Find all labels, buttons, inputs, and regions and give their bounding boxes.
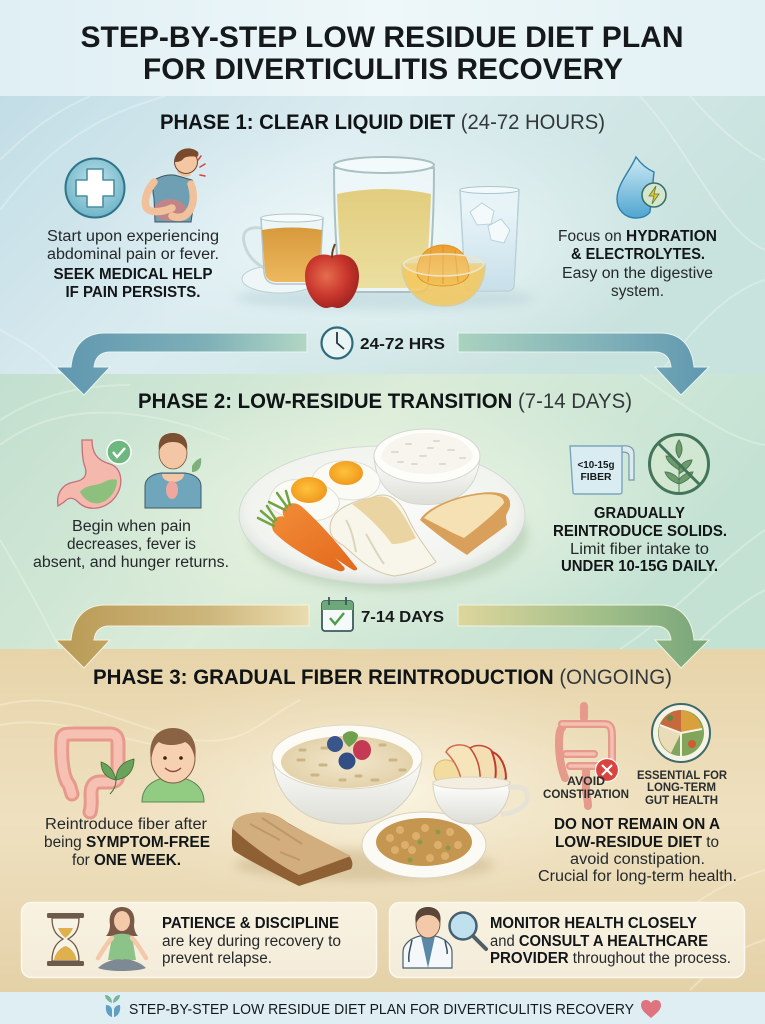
icon: fiber measuring cup [570,446,634,494]
heading: phase 3: PHASE 3: GRADUAL FIBER REINTRODUCTION (ONGOING) [93,666,672,689]
icon: carrots [258,491,357,571]
icon: heart [641,1000,661,1018]
arrow: phase 1 left [56,333,307,395]
text: reintroduce fiber: Reintroduce fiber after [45,816,207,833]
text: monitor health: MONITOR HEALTH CLOSELY [490,915,698,932]
card: patience and discipline [22,902,376,978]
card: monitor health [390,902,744,978]
label: avoid constipation [543,776,629,801]
heading: phase 2: PHASE 2: LOW-RESIDUE TRANSITION (7-14 DAYS) [138,390,632,413]
icon: fiber measuring cup: <10-15g [578,460,614,471]
panel: phase 1 clear liquid diet [0,96,765,375]
text: do not remain on low-residue diet: Crucial for long-term health. [538,868,737,885]
title: STEP-BY-STEP LOW RESIDUE DIET PLAN [80,21,684,54]
icon: water drop with lightning bolt [617,157,666,218]
icon: cup of apple slices [433,745,528,824]
text: gradually reintroduce solids: UNDER 10-15G DAILY. [561,558,718,575]
icon: calendar [322,597,353,631]
icon: fish fillet [330,495,436,576]
timeline label: 24-72 hrs: 24-72 HRS [360,336,445,353]
text: start upon experiencing: IF PAIN PERSISTS. [66,284,200,301]
text: start upon experiencing: Start upon experiencing [47,228,219,245]
text: reintroduce fiber [44,816,210,869]
text: patience and discipline: PATIENCE & DISCIPLINE [162,915,339,932]
icon: no plant [650,434,708,494]
timeline label: 24-72 hrs [322,328,445,358]
label: essential for gut health: LONG-TERM [647,782,716,794]
text: begin when pain decreases: decreases, fever is [67,536,196,553]
text: hydration and electrolytes [558,228,717,300]
text: start upon experiencing [47,228,219,301]
icon: whole grain toast [232,812,352,886]
text: do not remain on low-residue diet: LOW-RESIDUE DIET to [555,834,719,851]
icon: toast [420,492,510,555]
label: avoid constipation: AVOID [567,776,605,788]
text: hydration and electrolytes: Focus on HYDRATION [558,228,717,245]
icon: water glass with ice [460,186,519,291]
text: begin when pain decreases: Begin when pain [72,518,191,535]
icon: footer leaf [105,995,120,1017]
text: reintroduce fiber: for ONE WEEK. [72,852,181,869]
arrow: phase 2 left [56,605,309,668]
icon: colon with warning x [559,706,618,806]
illustration: clear liquids [235,157,535,310]
text: gradually reintroduce solids: Limit fiber intake to [570,541,709,558]
illustration: fiber foods [232,725,528,886]
label: essential for gut health [637,770,728,807]
label: essential for gut health: GUT HEALTH [645,795,718,807]
timeline label: 7-14 days [322,597,444,631]
icon: fried eggs [269,461,380,521]
text: hydration and electrolytes: Easy on the digestive [562,265,713,282]
text: patience and discipline: prevent relapse. [162,950,272,967]
title [80,21,684,86]
icon: balanced plate [652,704,710,762]
text: start upon experiencing: SEEK MEDICAL HELP [54,266,212,283]
icon: apple [305,244,359,308]
text: gradually reintroduce solids: GRADUALLY [594,505,686,522]
icon: magnifying glass [450,912,486,949]
icon: medical cross [66,158,124,218]
title: FOR DIVERTICULITIS RECOVERY [143,53,623,86]
icon: cup of tea [242,214,323,293]
icon: man with abdominal pain [145,148,205,222]
text: hydration and electrolytes: & ELECTROLYTES. [571,246,705,263]
plate [239,446,525,584]
heading: phase 1: PHASE 1: CLEAR LIQUID DIET (24-72 HOURS) [160,111,605,134]
icon: recovering person [145,433,201,508]
text: do not remain on low-residue diet: avoid constipation. [570,851,705,868]
text: monitor health [490,915,731,967]
icon: plate of legumes [362,812,486,878]
panel: phase 2 low-residue transition [0,374,765,649]
icon: doctor [403,907,452,968]
text: start upon experiencing: abdominal pain or fever. [47,246,219,263]
panel: phase 3 gradual fiber reintroduction [0,649,765,992]
text: patience and discipline [162,915,341,967]
label: essential for gut health: ESSENTIAL FOR [637,770,728,782]
icon: gelatin bowl [402,245,485,306]
text: hydration and electrolytes: system. [611,283,664,300]
icon: meditating woman [98,907,146,971]
text: monitor health: and CONSULT A HEALTHCARE [490,933,708,950]
text: begin when pain decreases [33,518,229,571]
text: do not remain on low-residue diet: DO NOT REMAIN ON A [554,816,720,833]
illustration: low-residue plate [239,429,528,590]
icon: colon with sprout [62,734,134,812]
icon: large glass of broth [334,157,434,292]
text: reintroduce fiber: being SYMPTOM-FREE [44,834,210,851]
label: avoid constipation: CONSTIPATION [543,789,629,801]
icon: clock [322,328,352,358]
icon: fiber measuring cup: FIBER [580,471,612,483]
arrow: phase 2 right [458,605,709,668]
text: gradually reintroduce solids: REINTRODUCE SOLIDS. [553,523,727,540]
icon: hourglass [47,913,84,966]
text: begin when pain decreases: absent, and hunger returns. [33,554,229,571]
header band [0,0,765,96]
timeline label: 7-14 days: 7-14 DAYS [361,609,444,626]
icon: stomach with check mark [58,440,131,508]
icon: smiling person [142,728,204,802]
text: monitor health: PROVIDER throughout the process. [490,950,731,967]
icon: oatmeal bowl with berries [272,725,422,824]
text: gradually reintroduce solids [553,505,727,575]
text: do not remain on low-residue diet [538,816,737,885]
footer band [0,992,765,1024]
footer text: STEP-BY-STEP LOW RESIDUE DIET PLAN FOR DIVERTICULITIS RECOVERY [129,1001,634,1018]
text: patience and discipline: are key during recovery to [162,933,341,950]
arrow: phase 1 right [458,333,709,395]
icon: rice bowl [374,429,480,504]
